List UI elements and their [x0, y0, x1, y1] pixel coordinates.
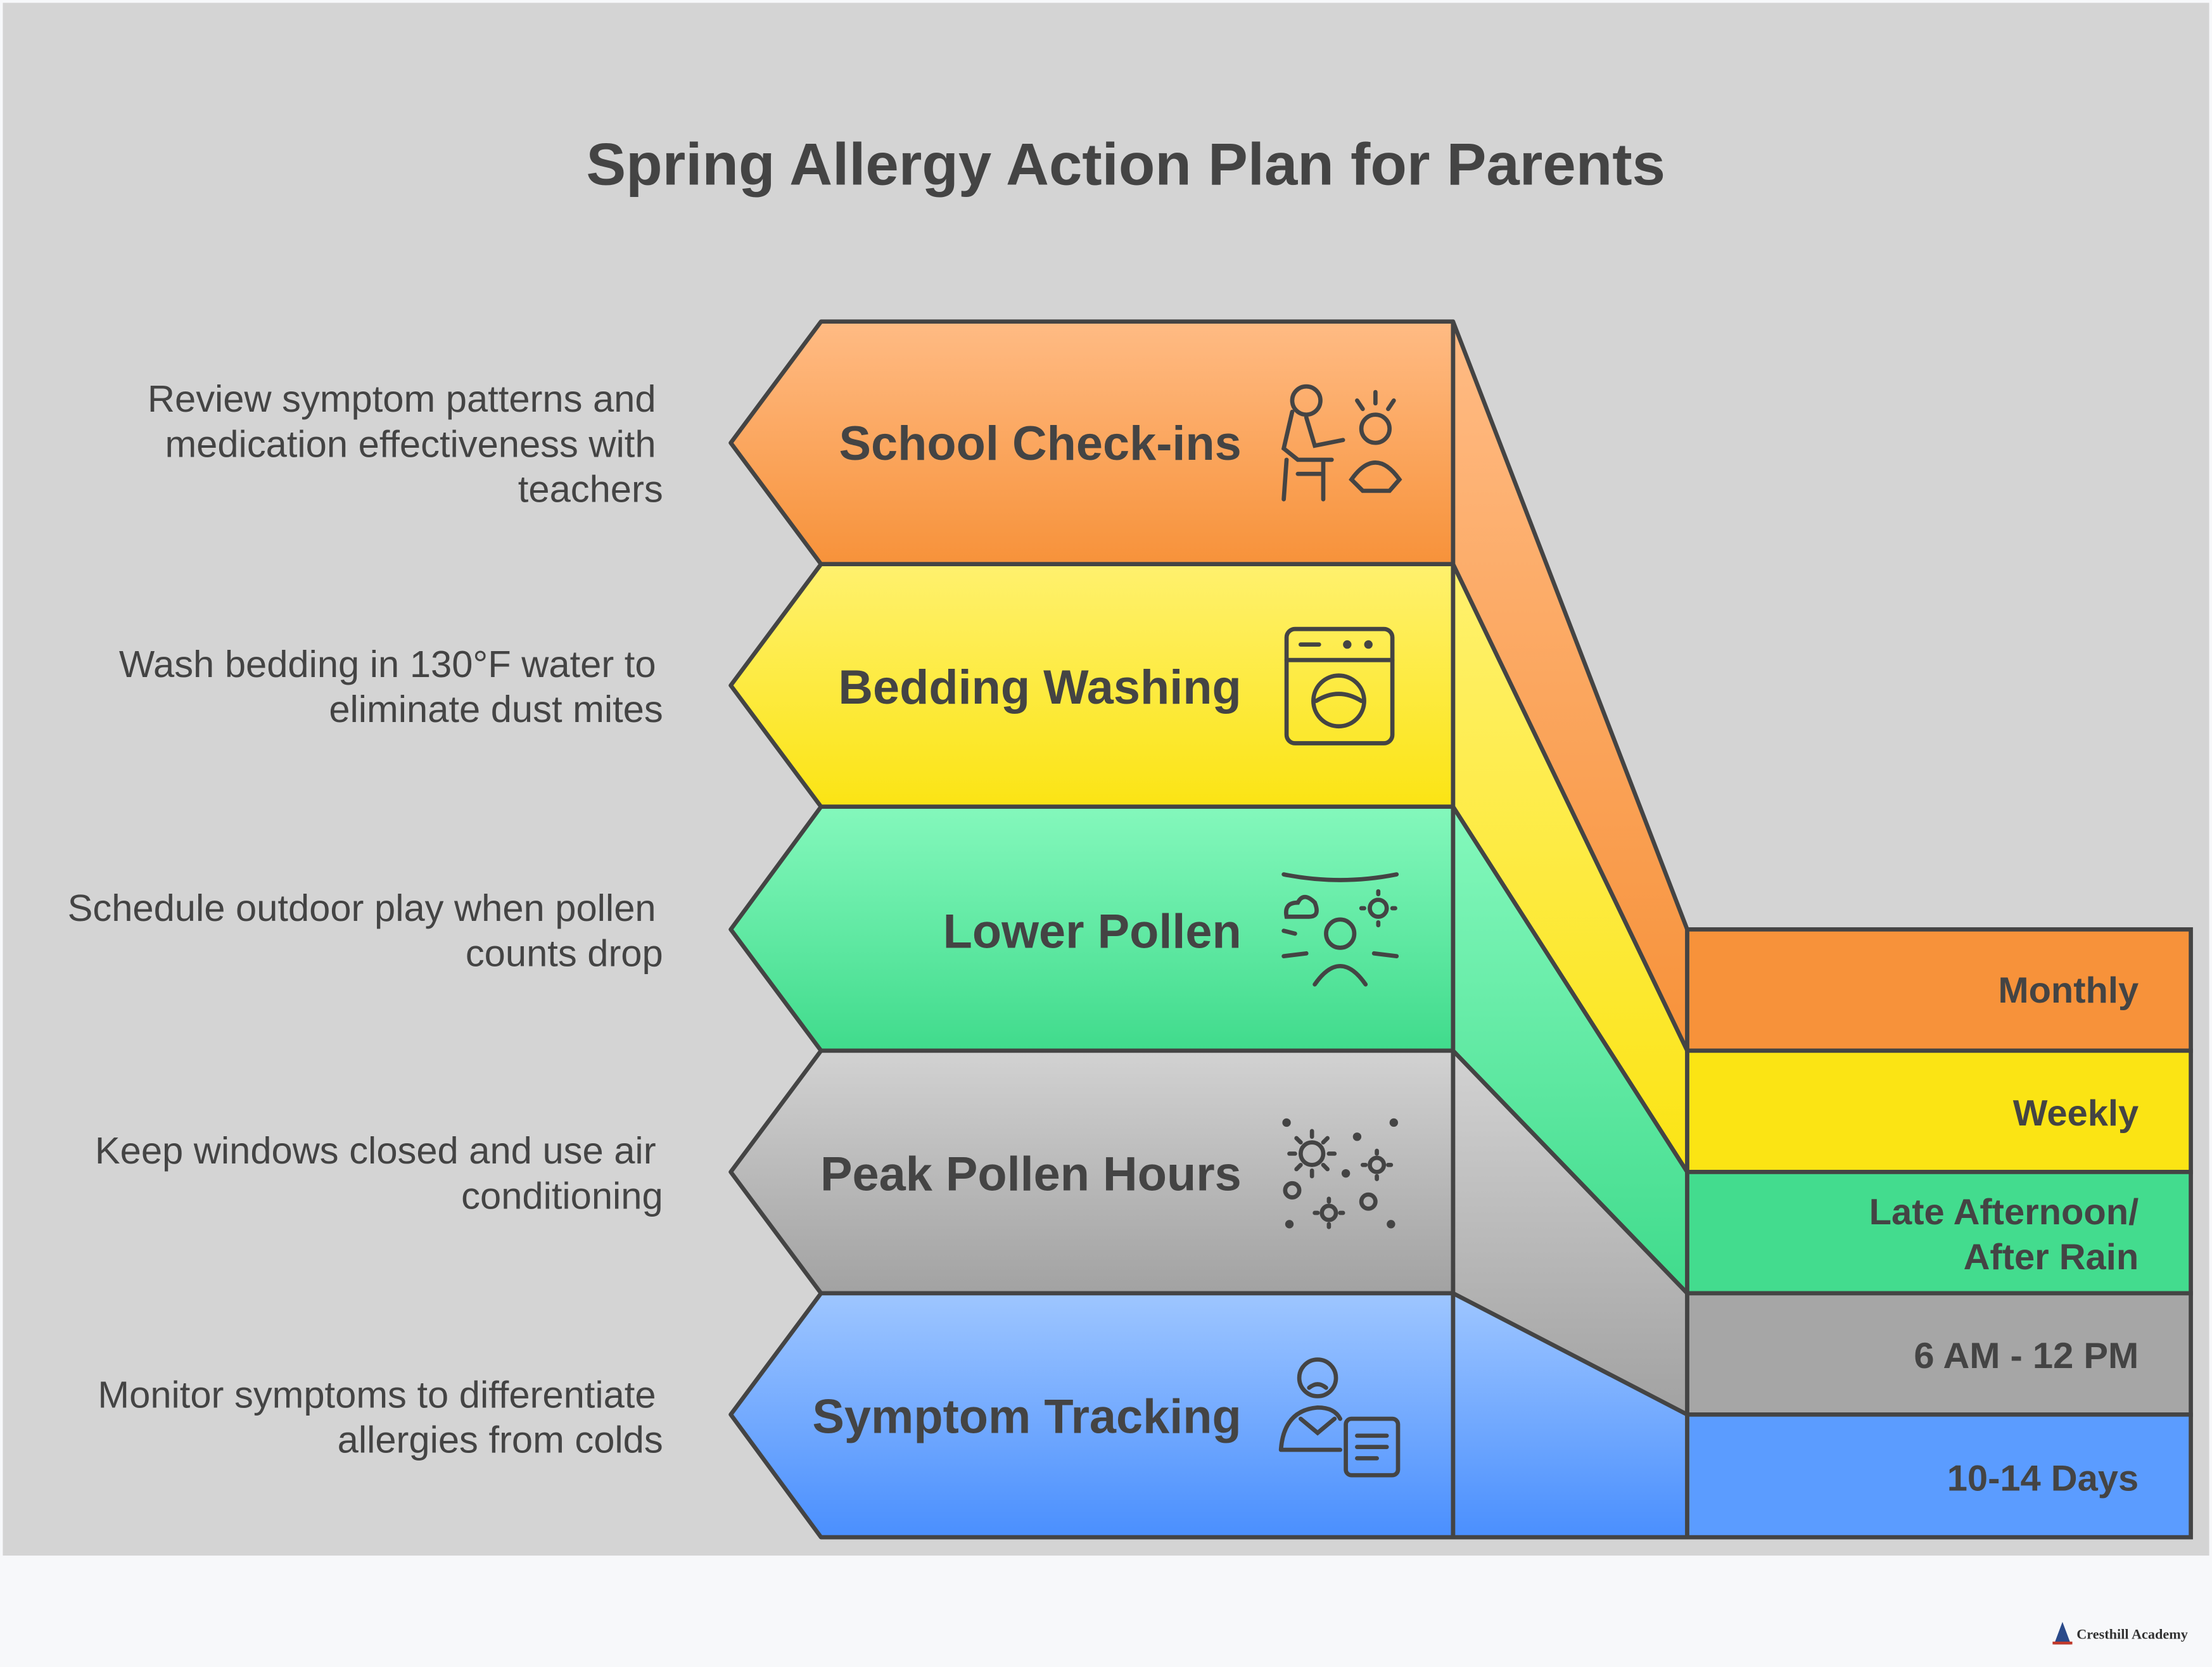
- icon: person with clipboard: [1281, 1360, 1398, 1475]
- description: Bedding Washing: Wash bedding in 130°F water to: [119, 643, 656, 685]
- description: Bedding Washing: [119, 643, 663, 730]
- arrow: Symptom Tracking: [731, 1293, 1453, 1537]
- description: School Check-ins: [148, 377, 663, 510]
- row: 10-14 Days: [1688, 1414, 2191, 1537]
- description: School Check-ins: medication effectiveness with: [165, 422, 656, 465]
- arrow: School Check-ins: School Check-ins: [839, 417, 1242, 471]
- icon: teacher and child: [1284, 386, 1399, 499]
- description: Lower Pollen: Schedule outdoor play when pollen: [68, 887, 656, 929]
- arrow: Lower Pollen: [731, 807, 1453, 1051]
- arrow: School Check-ins: [731, 322, 1453, 564]
- description: Lower Pollen: counts drop: [466, 932, 663, 974]
- arrow: Peak Pollen Hours: [731, 1051, 1453, 1293]
- arrow: Lower Pollen: Lower Pollen: [943, 904, 1242, 958]
- logo: Cresthill Academy: Cresthill Academy: [2076, 1626, 2188, 1642]
- row: Late Afternoon: [1688, 1172, 2191, 1293]
- icon: person with sun and cloud: [1284, 875, 1397, 984]
- row: 6 AM - 12 PM: [1688, 1293, 2191, 1414]
- description: Peak Pollen Hours: Keep windows closed and use air: [95, 1129, 656, 1172]
- row: Monthly: [1688, 929, 2191, 1051]
- description: Lower Pollen: [68, 887, 663, 974]
- title: Spring Allergy Action Plan for Parents: [586, 131, 1665, 198]
- frequency table: [1688, 929, 2191, 1537]
- row: Late Afternoon: Late Afternoon/: [1869, 1192, 2139, 1233]
- icon: washing machine: [1287, 629, 1392, 743]
- description: Peak Pollen Hours: [95, 1129, 663, 1217]
- row: 6 AM - 12 PM: 6 AM - 12 PM: [1914, 1336, 2139, 1376]
- description: School Check-ins: Review symptom patterns and: [148, 377, 656, 420]
- description: Bedding Washing: eliminate dust mites: [329, 688, 663, 730]
- row: Weekly: Weekly: [2013, 1093, 2139, 1134]
- connector bands: [1453, 322, 1688, 1537]
- arrow: Bedding Washing: [731, 564, 1453, 807]
- arrow: Bedding Washing: Bedding Washing: [838, 661, 1242, 714]
- description: Symptom Tracking: [98, 1373, 663, 1461]
- logo: Cresthill Academy: [2052, 1622, 2188, 1644]
- row: Weekly: [1688, 1051, 2191, 1172]
- description: School Check-ins: teachers: [518, 468, 663, 510]
- description: Symptom Tracking: Monitor symptoms to differentiate: [98, 1373, 656, 1416]
- arrow: Symptom Tracking: Symptom Tracking: [812, 1390, 1242, 1443]
- row: Monthly: Monthly: [1998, 970, 2139, 1011]
- row: Late Afternoon: After Rain: [1964, 1237, 2139, 1277]
- arrow: Peak Pollen Hours: Peak Pollen Hours: [820, 1147, 1242, 1201]
- row: 10-14 Days: 10-14 Days: [1947, 1459, 2139, 1499]
- icon: pollen particles: [1285, 1131, 1391, 1227]
- description: Symptom Tracking: allergies from colds: [338, 1419, 663, 1461]
- description: Peak Pollen Hours: conditioning: [461, 1174, 663, 1217]
